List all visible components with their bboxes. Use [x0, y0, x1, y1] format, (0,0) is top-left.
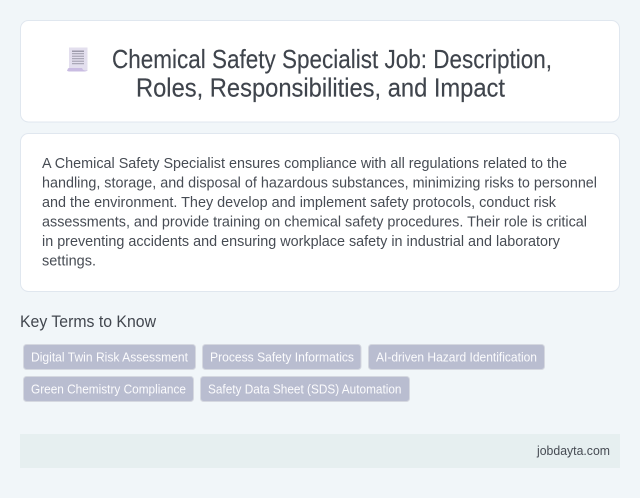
chip: process safety: Process Safety Informatics: [210, 350, 354, 364]
chip: green chemistry: [24, 376, 194, 402]
chip: digital twin: Digital Twin Risk Assessment: [31, 350, 188, 364]
description text: A Chemical Safety Specialist ensures compliance with all regulations related to the: [42, 155, 567, 172]
chip: hazard identification: AI-driven Hazard Identification: [376, 350, 537, 364]
chip: hazard identification: [368, 344, 544, 370]
chip: green chemistry: Green Chemistry Compliance: [31, 382, 186, 396]
title heading: Roles, Responsibilities, and Impact: [136, 72, 506, 102]
icon: document scroll: [67, 48, 88, 72]
description text: assessments, and provide training on chemical safety procedures. Their role is critical: [42, 214, 587, 230]
chip: sds automation: [200, 376, 410, 402]
chip: process safety: [202, 344, 361, 370]
description text: and the environment. They develop and implement safety protocols, conduct risk: [42, 194, 556, 211]
chip: digital twin: [24, 344, 196, 370]
footer bar: [20, 434, 620, 468]
heading: key terms: Key Terms to Know: [20, 312, 157, 331]
title heading: [112, 44, 552, 102]
title heading: Chemical Safety Specialist Job: Description,: [112, 44, 552, 74]
description text: settings.: [42, 252, 96, 270]
description text: in preventing accidents and ensuring workplace safety in industrial and laboratory: [42, 233, 560, 250]
footer bar: jobdayta.com: [536, 443, 610, 458]
panel: description card: [20, 134, 620, 292]
chip: sds automation: Safety Data Sheet (SDS) Automation: [208, 382, 402, 396]
description text: handling, storage, and disposal of hazardous substances, minimizing risks to personnel: [42, 174, 597, 192]
description text: [42, 155, 597, 270]
panel: title card: [20, 20, 620, 122]
